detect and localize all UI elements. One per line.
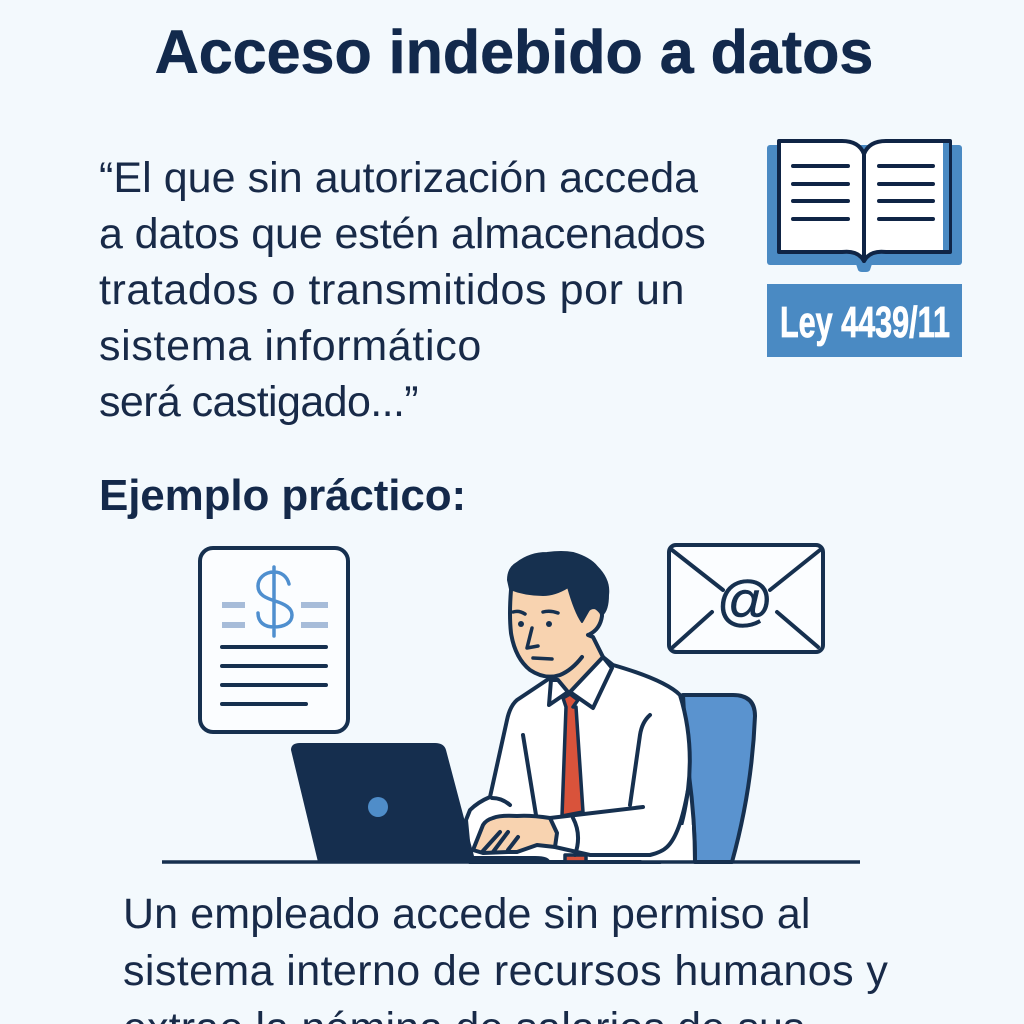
office chair [683,695,755,862]
laptop [291,743,550,862]
hair [508,552,608,622]
legal quote text: a datos que estén almacenados [99,210,706,258]
icon: law book [767,141,962,272]
legal quote text: será castigado...” [99,378,418,426]
description text [123,890,888,1024]
tie [562,694,586,862]
sleeve and hand [550,807,650,855]
description text: Un empleado accede sin permiso al [123,890,811,938]
law label [767,284,962,357]
legal quote text: sistema informático [99,322,482,370]
shirt [466,657,690,862]
neck and face [510,587,603,692]
subheading: Ejemplo práctico: [99,471,466,520]
collar [549,657,612,708]
law label: Ley 4439/11 [780,298,950,347]
shirt creases [492,715,650,815]
facial features [513,611,558,659]
icon: email envelope: @ [717,569,773,632]
legal quote text: “El que sin autorización acceda [99,154,698,202]
shirt back [640,775,695,862]
description text: sistema interno de recursos humanos y [123,947,888,995]
legal quote text [99,154,706,426]
title: Acceso indebido a datos [155,18,873,86]
employee figure [466,552,695,862]
icon: email envelope [669,545,823,652]
icon: salary document [200,548,348,732]
ear [582,607,603,657]
legal quote text: tratados o transmitidos por un [99,266,685,314]
desk line [162,860,860,864]
